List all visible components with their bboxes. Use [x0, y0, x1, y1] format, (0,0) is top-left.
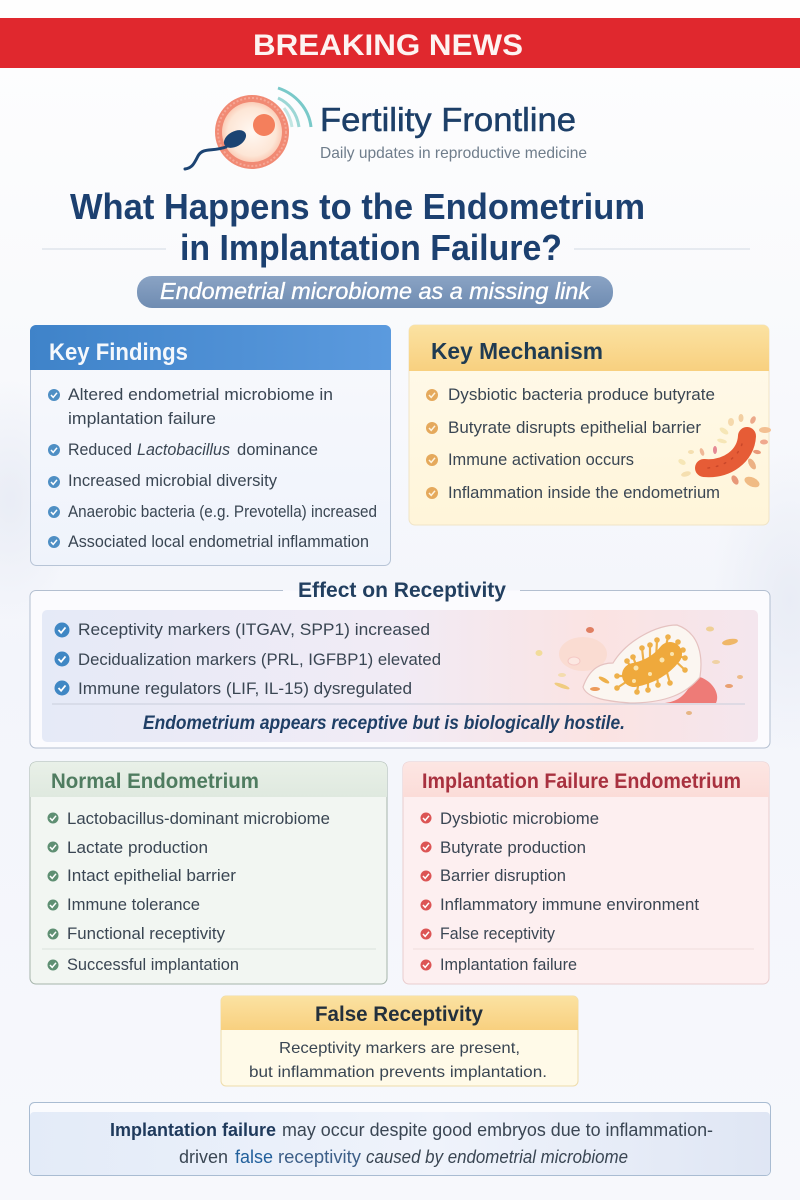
list: key findings: Anaerobic bacteria (e.g. Prevotella) increased	[68, 502, 377, 521]
panel: normal endometrium	[30, 762, 387, 984]
list: receptivity markers: Receptivity markers (ITGAV, SPP1) increased	[78, 620, 430, 639]
text: conclusion line two: driven	[179, 1147, 228, 1167]
text: conclusion line two: false	[235, 1147, 273, 1167]
heading: implantation failure endometrium: Implantation Failure Endometrium	[422, 770, 741, 793]
list: key findings: Reduced	[68, 440, 132, 459]
list: normal endometrium: Lactobacillus-dominant microbiome	[67, 809, 330, 828]
panel: false receptivity	[221, 996, 578, 1086]
list: normal endometrium	[42, 809, 376, 974]
heading: normal endometrium: Normal Endometrium	[51, 770, 259, 793]
list: implantation failure endometrium: Dysbiotic microbiome	[440, 809, 599, 828]
icon: red bacterium	[677, 414, 771, 489]
brand name: Fertility Frontline	[320, 101, 576, 138]
list: key findings: Altered endometrial microbiome in	[68, 385, 333, 404]
text: conclusion line one: Implantation failure	[110, 1120, 276, 1140]
panel: implantation failure endometrium	[403, 762, 769, 984]
list: key mechanism: Dysbiotic bacteria produce butyrate	[448, 385, 715, 404]
list: key mechanism: Butyrate disrupts epithelial barrier	[448, 418, 701, 437]
text: false receptivity explanation: Receptivity markers are present,	[279, 1040, 520, 1057]
heading: false receptivity: False Receptivity	[315, 1003, 483, 1026]
panel: key findings	[30, 325, 391, 566]
text: conclusion line two: receptivity	[278, 1147, 361, 1167]
text: conclusion line two	[179, 1147, 628, 1167]
list: normal endometrium: Immune tolerance	[67, 895, 200, 914]
brand tagline: Daily updates in reproductive medicine	[320, 145, 587, 162]
list: normal endometrium: Successful implantation	[67, 955, 239, 974]
text: false receptivity explanation: but inflammation prevents implantation.	[249, 1064, 547, 1081]
list: normal endometrium: Functional receptivity	[67, 924, 225, 943]
list: key mechanism: Immune activation occurs	[448, 450, 634, 469]
illustration: bacterium in cell	[536, 625, 743, 715]
list: key findings: Associated local endometrial inflammation	[68, 532, 369, 551]
list: normal endometrium: Intact epithelial barrier	[67, 866, 236, 885]
list: receptivity markers: Decidualization markers (PRL, IGFBP1) elevated	[78, 650, 441, 669]
text: conclusion line one: may occur despite good embryos due to inflammation-	[282, 1120, 713, 1140]
panel: conclusion	[30, 1102, 770, 1176]
list: normal endometrium: Lactate production	[67, 838, 208, 857]
title: What Happens to the Endometrium	[70, 186, 645, 227]
list: implantation failure endometrium: False receptivity	[440, 924, 555, 943]
title: in Implantation Failure?	[180, 227, 562, 268]
list: receptivity markers	[54, 620, 441, 698]
list: key findings: implantation failure	[68, 409, 216, 428]
text: conclusion line two: caused by endometrial microbiome	[366, 1147, 628, 1167]
list: key findings	[48, 385, 377, 551]
list: implantation failure endometrium: Butyrate production	[440, 838, 586, 857]
list: key findings: dominance	[237, 440, 318, 459]
heading: effect on receptivity: Effect on Receptivity	[298, 579, 506, 602]
list: implantation failure endometrium: Barrier disruption	[440, 866, 566, 885]
list: key findings: Increased microbial diversity	[68, 471, 277, 490]
heading: key findings: Key Findings	[49, 339, 188, 366]
panel: key mechanism	[409, 325, 771, 525]
text: false receptivity explanation	[249, 1040, 547, 1081]
panel: effect on receptivity	[30, 579, 770, 748]
list: implantation failure endometrium	[413, 809, 754, 974]
list: implantation failure endometrium: Implantation failure	[440, 955, 577, 974]
callout: biologically hostile: Endometrium appears receptive but is biologically hostile.	[143, 713, 625, 734]
logo: egg and sperm icon	[185, 88, 311, 169]
list: receptivity markers: Immune regulators (LIF, IL-15) dysregulated	[78, 679, 412, 698]
list: key mechanism	[426, 385, 720, 502]
banner: breaking news	[0, 18, 800, 68]
banner: breaking news: BREAKING NEWS	[253, 29, 523, 62]
list: implantation failure endometrium: Inflammatory immune environment	[440, 895, 699, 914]
list: key mechanism: Inflammation inside the endometrium	[448, 483, 720, 502]
title	[42, 186, 750, 268]
subtitle pill: Endometrial microbiome as a missing link	[160, 278, 592, 304]
list: key findings: Lactobacillus	[137, 440, 230, 459]
heading: key mechanism: Key Mechanism	[431, 338, 603, 364]
